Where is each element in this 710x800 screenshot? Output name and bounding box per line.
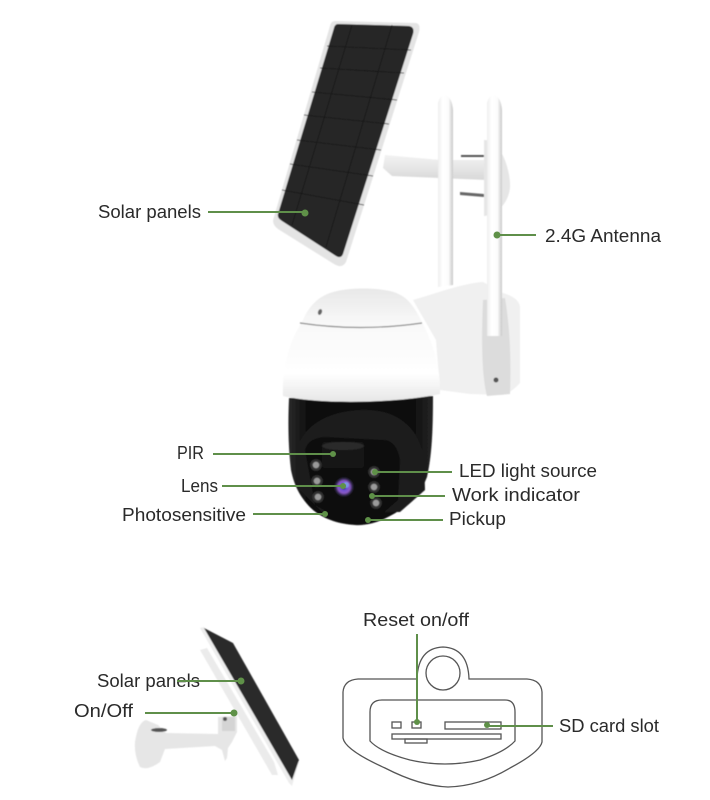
ports [392,722,501,743]
LED lights [312,460,380,508]
port panel diagram [343,647,542,787]
solar panel bracket [383,140,510,216]
inner outline [370,700,515,764]
camera black body [288,396,433,525]
label: pickup: Pickup [449,509,506,529]
label: reset on/off: Reset on/off [363,610,470,630]
label: reset on/off [363,610,470,725]
label: work indicator: Work indicator [452,485,580,505]
label: on/off: On/Off [74,701,134,721]
outer outline [343,647,542,787]
camera white dome [283,289,440,402]
label: LED light source [372,461,597,481]
label: side solar panels [97,671,244,691]
label: pickup [365,509,506,529]
label: on/off [74,701,238,721]
label: PIR: PIR [177,443,204,463]
label: PIR [177,443,336,463]
label: 2.4G antenna [494,226,662,246]
mounting hole [426,656,460,690]
wall mount arm [413,282,520,396]
side panel back [200,648,278,775]
solar panel [273,21,420,266]
label: SD card slot [484,716,659,736]
label: 2.4G antenna: 2.4G Antenna [545,226,662,246]
label: lens [181,476,346,496]
label: solar panels: Solar panels [98,202,201,222]
PIR sensor [322,442,364,468]
label: photosensitive: Photosensitive [122,505,246,525]
side view of solar panel with bracket [135,627,299,786]
side bracket [135,716,237,768]
label: SD card slot: SD card slot [559,716,659,736]
camera illustration [273,21,520,525]
lens [334,477,354,497]
label: side solar panels: Solar panels [97,671,200,691]
label: LED light source: LED light source [459,461,597,481]
label: photosensitive [122,505,328,525]
label: solar panels [98,202,308,222]
label: lens: Lens [181,476,218,496]
side panel [200,627,299,786]
label: work indicator [369,485,580,505]
antennas [438,95,502,336]
